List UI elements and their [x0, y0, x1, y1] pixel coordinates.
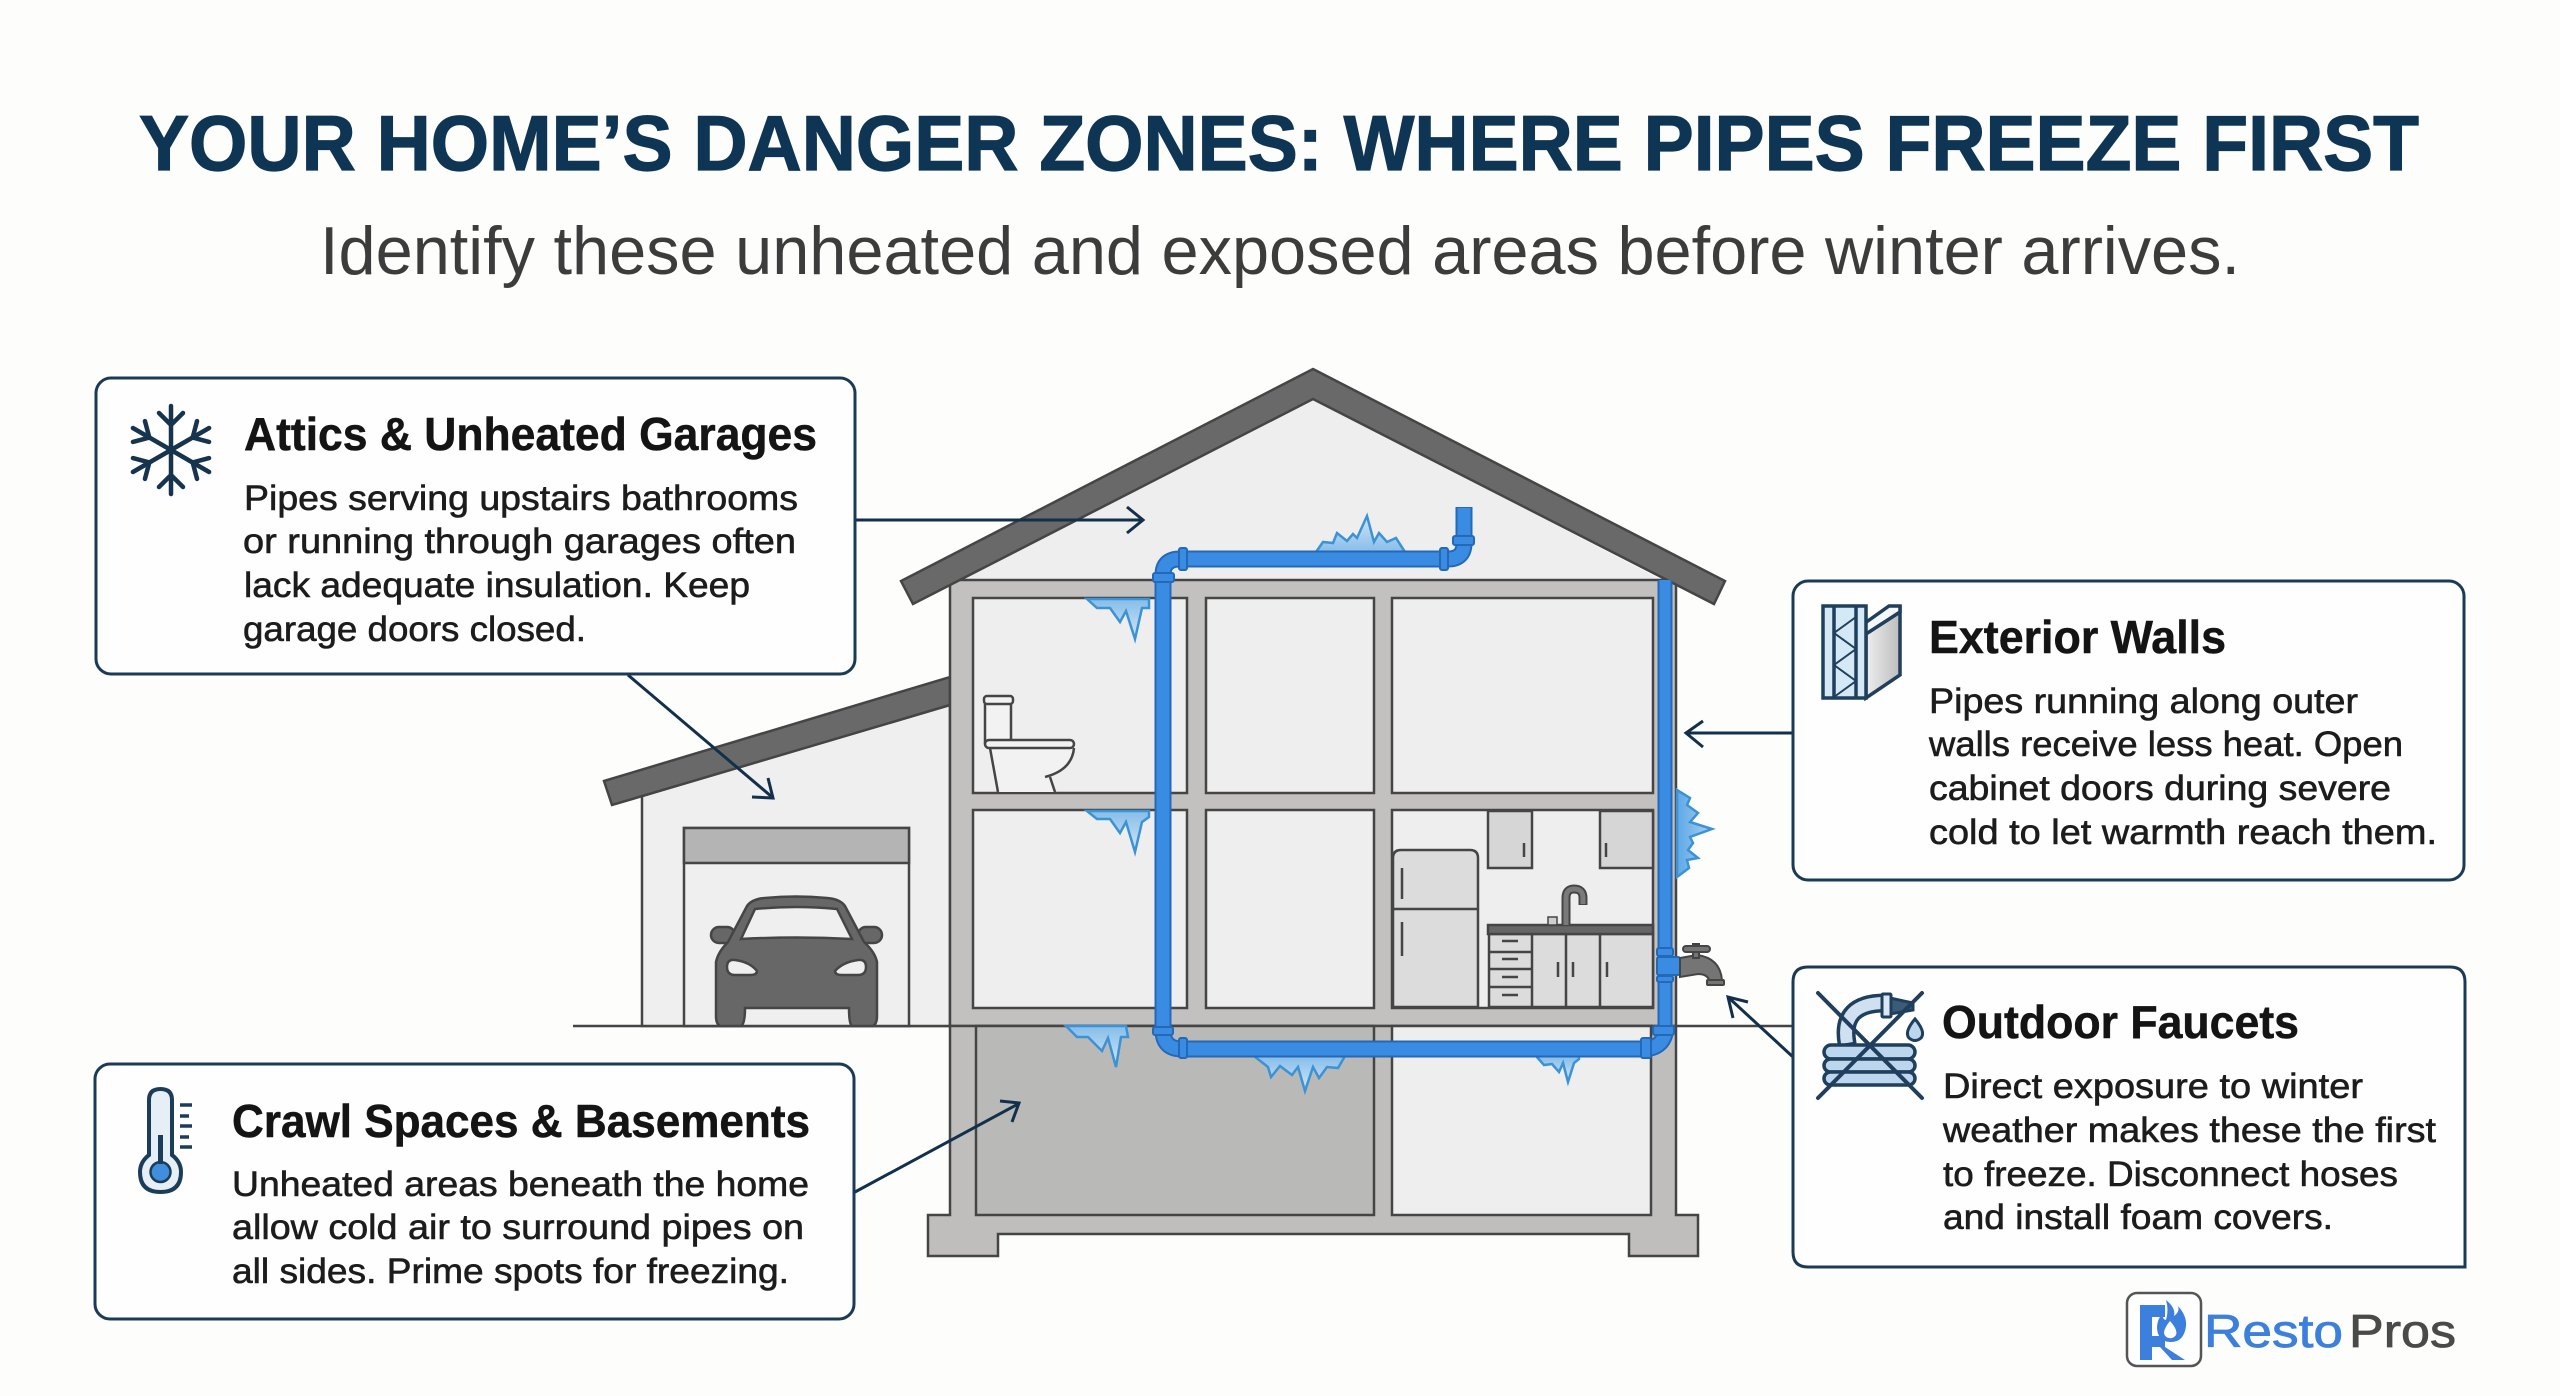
pipe collars	[1153, 536, 1680, 1058]
icon: wall section	[1823, 606, 1900, 698]
heading: Crawl Spaces & Basements	[232, 1095, 810, 1147]
card box	[1793, 581, 2464, 880]
arrow: exterior walls	[1686, 721, 1793, 747]
base cabinets	[1489, 934, 1653, 1007]
upstairs room right	[1392, 598, 1653, 793]
logo badge	[2127, 1293, 2201, 1366]
blue water pipes	[1153, 507, 1680, 1058]
body text: Pipes serving upstairs bathrooms	[244, 479, 798, 518]
icon: thermometer	[140, 1089, 192, 1192]
body text: or running through garages often	[243, 522, 796, 561]
upper cabinets	[1488, 811, 1653, 868]
upstairs room middle	[1206, 598, 1374, 793]
body text: all sides. Prime spots for freezing.	[232, 1252, 789, 1291]
main roof	[901, 369, 1725, 604]
supply and basement pipe	[1163, 578, 1666, 1049]
exterior wall pipe	[1658, 580, 1672, 1030]
upstairs room left	[973, 598, 1187, 793]
attic	[961, 399, 1662, 580]
ice formations	[1066, 516, 1712, 1091]
counter	[1488, 925, 1653, 934]
ice on exterior wall	[1677, 790, 1712, 877]
garage door opening	[684, 828, 909, 1026]
body text: Pipes running along outer	[1929, 682, 2358, 721]
body text: allow cold air to surround pipes on	[232, 1208, 804, 1247]
icon: disconnected hose	[1818, 993, 1923, 1098]
body text	[1928, 682, 2437, 852]
arrow: outdoor faucets	[1728, 997, 1793, 1057]
icon: fridge	[1393, 850, 1478, 1007]
foundation	[928, 1026, 1698, 1256]
body text: Direct exposure to winter	[1943, 1067, 2363, 1106]
body text	[232, 1165, 809, 1291]
nozzle	[1882, 994, 1913, 1017]
logo wordmark	[2204, 1305, 2456, 1357]
icon: car	[711, 896, 882, 1026]
water drop	[1907, 1019, 1923, 1040]
title: YOUR HOME’S DANGER ZONES: WHERE PIPES FREEZE FIRST	[139, 99, 2419, 187]
hose coils	[1824, 1045, 1915, 1085]
icon: toilet	[984, 696, 1074, 792]
prohibition cross	[1818, 993, 1922, 1098]
ice under second floor	[1087, 811, 1149, 852]
ice under basement pipe centre	[1254, 1056, 1345, 1091]
body text: walls receive less heat. Open	[1928, 725, 2403, 764]
ground line	[573, 1025, 1793, 1027]
logo wordmark: Resto	[2204, 1305, 2343, 1357]
garage wall	[642, 705, 950, 1026]
garage roof	[604, 677, 950, 805]
heading: Attics & Unheated Garages	[244, 408, 817, 460]
body text: and install foam covers.	[1943, 1198, 2333, 1237]
garage door header	[684, 828, 909, 863]
kitchen	[1393, 811, 1653, 1007]
panel: crawl spaces and basements	[95, 1064, 854, 1319]
body text: to freeze. Disconnect hoses	[1943, 1155, 2398, 1194]
logo wordmark: Pros	[2349, 1305, 2456, 1357]
body text: weather makes these the first	[1942, 1111, 2436, 1150]
arrow: garage	[628, 675, 773, 798]
icon: snowflake	[127, 406, 215, 494]
upper structure walls	[950, 580, 1676, 1026]
ice at crawl space ceiling	[1066, 1026, 1128, 1067]
ice under attic floor	[1087, 599, 1149, 639]
icon: outdoor faucet	[1680, 944, 1724, 985]
ice above attic pipe	[1316, 516, 1405, 552]
arrow: crawl spaces	[855, 1101, 1019, 1192]
heading: Exterior Walls	[1929, 611, 2226, 663]
body text: cold to let warmth reach them.	[1929, 813, 2437, 852]
main floor room left	[973, 810, 1187, 1008]
crawl space	[976, 1026, 1374, 1215]
hose arc	[1846, 1003, 1885, 1043]
subtitle: Identify these unheated and exposed areas before winter arrives.	[320, 213, 2240, 289]
panel: outdoor faucets	[1793, 967, 2465, 1267]
sink faucet	[1548, 889, 1583, 925]
body text: cabinet doors during severe	[1929, 769, 2391, 808]
ice under basement pipe right	[1536, 1056, 1579, 1082]
garage	[604, 677, 950, 1026]
logo: RestoPros	[2127, 1293, 2456, 1366]
arrow: attic	[855, 507, 1143, 533]
main floor room kitchen	[1392, 810, 1653, 1008]
body text	[243, 479, 798, 649]
body text: lack adequate insulation. Keep	[244, 566, 750, 605]
basement room right	[1392, 1026, 1651, 1215]
attic pipe	[1163, 507, 1464, 585]
body text	[1942, 1067, 2436, 1237]
card box	[96, 378, 855, 674]
card box	[1793, 967, 2465, 1267]
house cross-section	[901, 369, 1725, 1256]
body text: Unheated areas beneath the home	[232, 1165, 809, 1204]
panel: attics and unheated garages	[96, 378, 855, 674]
card box	[95, 1064, 854, 1319]
main floor room middle	[1206, 810, 1374, 1008]
heading: Outdoor Faucets	[1942, 996, 2299, 1048]
panel: exterior walls	[1793, 581, 2464, 880]
body text: garage doors closed.	[243, 610, 586, 649]
